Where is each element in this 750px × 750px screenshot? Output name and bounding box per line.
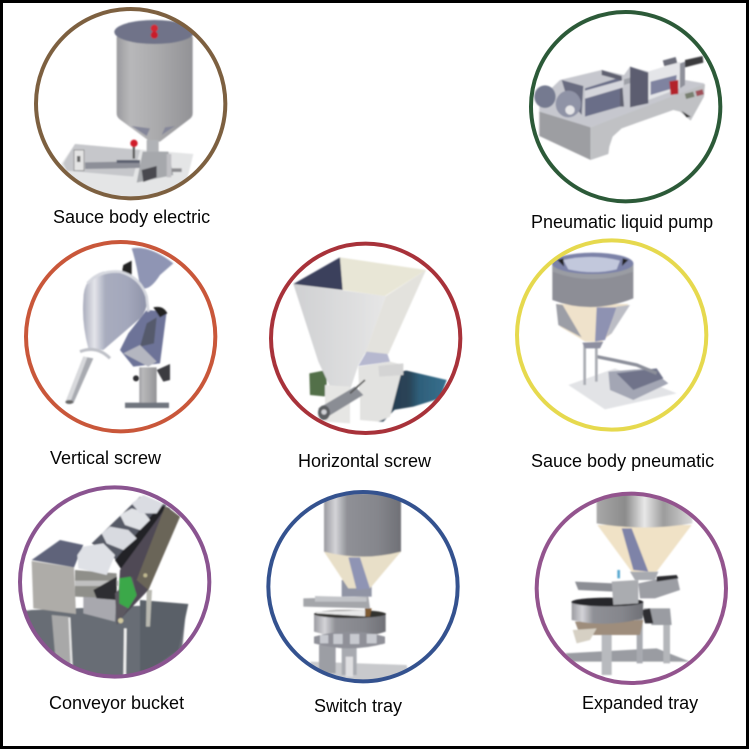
badge: vertical screw (26, 242, 215, 431)
label: Sauce body electric: Sauce body electric (53, 207, 210, 227)
badge: expanded tray (537, 490, 726, 683)
label: Horizontal screw: Horizontal screw (298, 451, 432, 471)
label: Vertical screw: Vertical screw (50, 448, 162, 468)
label: Sauce body pneumatic: Sauce body pneumatic (531, 451, 714, 471)
badge: conveyor bucket (20, 487, 209, 683)
label: Conveyor bucket: Conveyor bucket (49, 693, 184, 713)
label: Switch tray: Switch tray (314, 696, 402, 716)
badge: switch tray (268, 492, 458, 683)
badge: sauce body pneumatic (517, 240, 706, 430)
badge: pneumatic liquid pump (531, 12, 720, 201)
badge: sauce body electric (36, 9, 225, 200)
label: Expanded tray: Expanded tray (582, 693, 698, 713)
label: Pneumatic liquid pump: Pneumatic liquid pump (531, 212, 713, 232)
badge: horizontal screw (271, 244, 460, 433)
